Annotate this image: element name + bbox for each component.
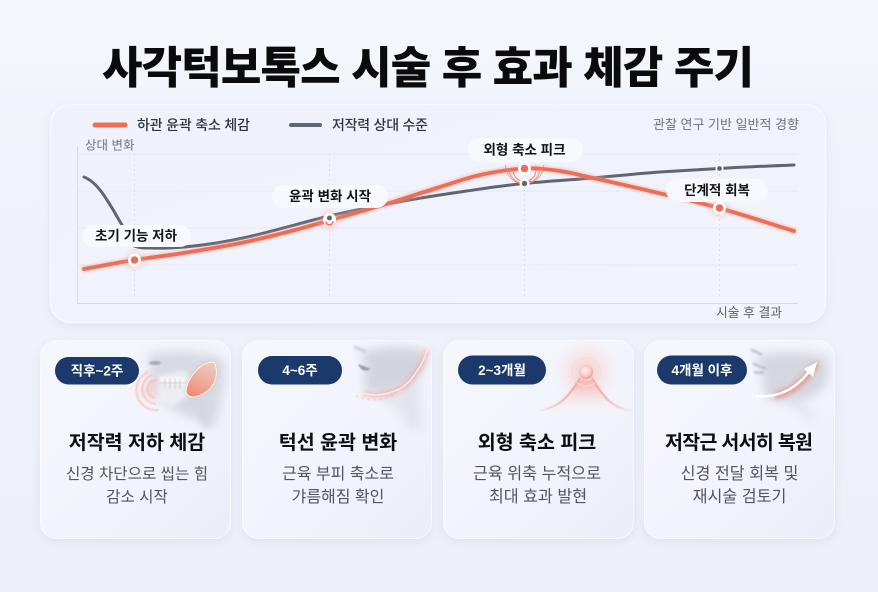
callout: initial function decline: 초기 기능 저하: [95, 228, 178, 244]
badge: right after to 2 weeks: [55, 357, 139, 384]
callout: contour change start: [272, 185, 388, 208]
card text: 감소 시작: [106, 488, 168, 506]
card text: 근육 부피 축소로: [282, 465, 394, 483]
card heading: 저작력 저하 체감: [69, 432, 205, 454]
card text: 신경 전달 회복 및: [681, 465, 798, 483]
curve: contour reduction: [84, 168, 794, 269]
marker 3 peak: [506, 162, 544, 188]
x axis label: 시술 후 결과: [716, 305, 782, 320]
callout: initial function decline: [82, 225, 191, 247]
badge: right after to 2 weeks: 직후~2주: [71, 364, 123, 378]
panel: card 3: [444, 338, 634, 538]
curve: masticatory force: [84, 165, 794, 248]
title: 사각턱보톡스 시술 후 효과 체감 주기: [102, 44, 754, 93]
callout: contour change start: 윤곽 변화 시작: [289, 189, 372, 204]
note: general trend: 관찰 연구 기반 일반적 경향: [653, 117, 799, 132]
card text: 갸름해짐 확인: [292, 488, 384, 506]
legend: lower face contour reduction: 하관 윤곽 축소 체감: [137, 117, 250, 133]
card text: 재시술 검토기: [693, 488, 786, 506]
badge: 2 to 3 months: [458, 356, 546, 384]
callout: gradual recovery: [666, 179, 768, 202]
curve glow: [84, 168, 794, 269]
icon: jawline: [354, 347, 427, 428]
card text: 신경 차단으로 씹는 힘: [66, 465, 208, 483]
badge: after 4 months: 4개월 이후: [672, 362, 732, 378]
icon: recovery arrow: [751, 350, 828, 420]
callout: gradual recovery: 단계적 회복: [684, 183, 750, 198]
badge: 2 to 3 months: 2~3개월: [478, 362, 526, 378]
y axis label: 상대 변화: [85, 138, 135, 152]
card heading: 턱선 윤곽 변화: [279, 432, 397, 454]
callout: peak reduction: [468, 138, 583, 162]
chart plot: [78, 146, 798, 304]
card text: 근육 위축 누적으로: [473, 465, 601, 483]
legend: masticatory force level: 저작력 상대 수준: [332, 117, 428, 133]
icon: jaw muscle: [128, 352, 225, 428]
panel: card 1: [40, 340, 230, 538]
marker 2: [316, 206, 344, 234]
panel: card 4: [644, 340, 834, 538]
panel: effect chart: [50, 104, 826, 322]
badge: after 4 months: [657, 356, 747, 384]
card heading: 외형 축소 피크: [478, 432, 596, 454]
panel: card 2: [242, 340, 432, 538]
card heading: 저작근 서서히 복원: [665, 432, 813, 454]
card text: 최대 효과 발현: [489, 488, 587, 506]
badge: 4 to 6 weeks: 4~6주: [282, 363, 318, 378]
marker 4: [706, 164, 734, 222]
callout: peak reduction: 외형 축소 피크: [483, 142, 566, 158]
badge: 4 to 6 weeks: [258, 356, 342, 384]
marker 1: [120, 246, 148, 274]
icon: peak: [538, 348, 630, 412]
arrow: [757, 362, 817, 396]
